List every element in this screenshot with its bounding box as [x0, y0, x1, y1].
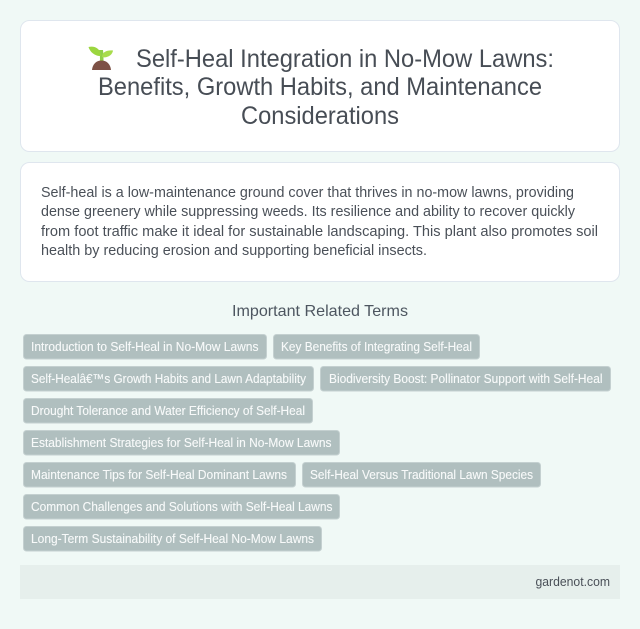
tag: [24, 334, 266, 359]
tag: Drought Tolerance and Water Efficiency of Self-Heal: [31, 404, 305, 418]
tag: Common Challenges and Solutions with Self-Heal Lawns: [31, 500, 332, 514]
tag: Self-Heal Versus Traditional Lawn Species: [310, 468, 533, 482]
footer source text: gardenot.com: [536, 574, 610, 589]
tag: [302, 462, 540, 487]
title: Self-Heal Integration in No-Mow Lawns:: [136, 45, 554, 73]
icon: seedling: [88, 47, 113, 70]
tag: Biodiversity Boost: Pollinator Support with Self-Heal: [329, 372, 602, 386]
tag: Maintenance Tips for Self-Heal Dominant Lawns: [31, 468, 287, 482]
tag: [24, 462, 296, 487]
tag: Long-Term Sustainability of Self-Heal No-Mow Lawns: [31, 532, 314, 546]
panel: related terms tags: [24, 334, 610, 551]
description text: [41, 185, 598, 259]
title: Considerations: [241, 102, 399, 130]
title: [98, 45, 554, 130]
tag: [24, 366, 314, 391]
description text: health by reducing erosion and supporting beneficial insects.: [41, 243, 427, 259]
tag: [24, 494, 340, 519]
tag: [24, 430, 340, 455]
heading: important related terms: Important Related Terms: [232, 303, 408, 320]
description text: dense greenery while suppressing weeds. Its resilience and ability to recover quickly: [41, 204, 576, 220]
tag: Introduction to Self-Heal in No-Mow Lawns: [31, 340, 258, 354]
title: Benefits, Growth Habits, and Maintenance: [98, 73, 542, 101]
tag: [24, 526, 322, 551]
tag: Establishment Strategies for Self-Heal in No-Mow Lawns: [31, 436, 332, 450]
panel: description card: [20, 162, 620, 282]
tag: Key Benefits of Integrating Self-Heal: [281, 340, 472, 354]
footer: [20, 565, 620, 599]
tag: Self-Healâ€™s Growth Habits and Lawn Adaptability: [31, 372, 307, 386]
description text: from foot traffic make it ideal for sustainable landscaping. This plant also promotes soil: [41, 224, 598, 240]
tag: [320, 366, 610, 391]
tag: [24, 398, 312, 423]
description text: Self-heal is a low-maintenance ground cover that thrives in no-mow lawns, providing: [41, 185, 574, 201]
panel: title card: [20, 20, 620, 152]
tag: [274, 334, 480, 359]
